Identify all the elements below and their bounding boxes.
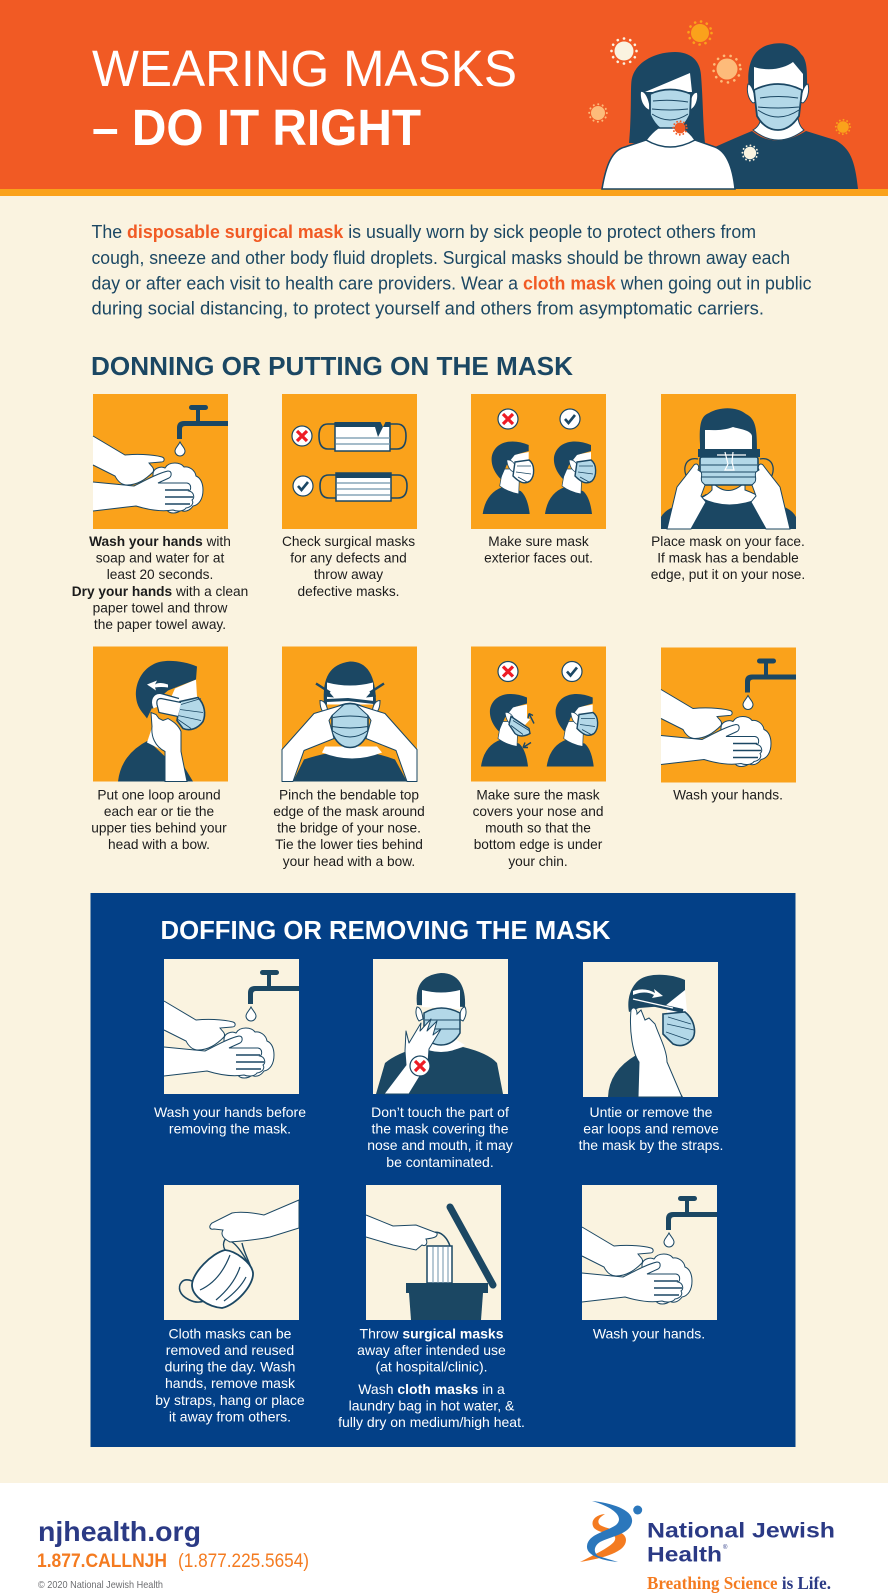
doffing step 5: bin: Throw surgical masks bbox=[360, 1325, 504, 1341]
step 1: wash hands: soap and water for at bbox=[96, 551, 224, 566]
step 7: cover nose and mouth: mouth so that the bbox=[485, 821, 591, 836]
step 2: check masks: throw away bbox=[314, 567, 383, 582]
header banner bbox=[0, 0, 888, 196]
virus particles bbox=[589, 22, 850, 161]
step 4: place mask on face: edge, put it on your nose. bbox=[651, 567, 805, 582]
step 6: pinch the bendable edge: Pinch the bendable top bbox=[279, 787, 419, 802]
step 2: check masks bbox=[282, 394, 417, 599]
doffing step 4: cloth mask: it away from others. bbox=[169, 1408, 291, 1424]
doffing step 3: remove ear loops bbox=[579, 962, 723, 1153]
intro paragraph bbox=[92, 222, 812, 318]
title: WEARING MASKS bbox=[92, 40, 517, 97]
logo: National Jewish Health: National Jewish bbox=[647, 1520, 835, 1542]
step 1: wash hands: least 20 seconds. bbox=[107, 567, 213, 582]
step 5: put loop around ear: head with a bow. bbox=[108, 837, 210, 852]
step 6: pinch the bendable edge: the bridge of your nose. bbox=[277, 821, 421, 836]
step 2: check masks: defective masks. bbox=[298, 584, 399, 599]
step 5: put loop around ear: each ear or tie the bbox=[104, 804, 214, 819]
logo: National Jewish Health: Breathing Science is Life. bbox=[647, 1573, 831, 1593]
doffing step 5: bin: fully dry on medium/high heat. bbox=[338, 1414, 525, 1430]
website and phone: njhealth.org bbox=[38, 1516, 201, 1547]
heading: doffing: DOFFING OR REMOVING THE MASK bbox=[160, 917, 611, 945]
doffing step 2: don't touch the mask: nose and mouth, it may bbox=[367, 1137, 513, 1153]
step 6: pinch the bendable edge: edge of the mask around bbox=[273, 804, 425, 819]
doffing step 1: wash hands: removing the mask. bbox=[169, 1121, 291, 1137]
step 7: cover nose and mouth: bottom edge is under bbox=[474, 837, 603, 852]
title bbox=[92, 40, 517, 156]
doffing step 5: bin: laundry bag in hot water, & bbox=[349, 1398, 515, 1414]
doffing step 3: remove ear loops: Untie or remove the bbox=[590, 1104, 713, 1120]
doffing step 1: wash hands bbox=[154, 959, 306, 1137]
doffing step 2: don't touch the mask: be contaminated. bbox=[386, 1154, 494, 1170]
step 7: cover nose and mouth: Make sure the mask bbox=[476, 787, 600, 802]
step 8: wash hands bbox=[661, 648, 796, 802]
doffing step 5: bin: away after intended use bbox=[357, 1342, 506, 1358]
intro paragraph: The disposable surgical mask is usually worn by sick people to protect others from bbox=[92, 222, 756, 242]
intro paragraph: day or after each visit to health care providers. Wear a cloth mask when going out in public bbox=[92, 274, 812, 294]
step 6: pinch the bendable edge: Tie the lower ties behind bbox=[275, 837, 423, 852]
step 6: pinch the bendable edge: your head with a bow. bbox=[283, 854, 415, 869]
doffing step 4: cloth mask: during the day. Wash bbox=[165, 1359, 295, 1375]
step 7: cover nose and mouth bbox=[471, 646, 606, 869]
doffing step 5: bin: Wash cloth masks in a bbox=[358, 1381, 505, 1397]
doffing step 2: don't touch the mask: the mask covering the bbox=[372, 1121, 509, 1137]
step 7: cover nose and mouth: your chin. bbox=[508, 854, 568, 869]
step 1: wash hands: Dry your hands with a clean bbox=[72, 584, 248, 599]
website and phone: (1.877.225.5654) bbox=[178, 1551, 309, 1572]
panel: doffing bbox=[90, 893, 796, 1447]
logo: National Jewish Health bbox=[580, 1501, 835, 1593]
step 6: pinch the bendable edge bbox=[273, 646, 425, 869]
intro paragraph: during social distancing, to protect yourself and others from asymptomatic carriers. bbox=[92, 298, 764, 318]
website and phone: © 2020 National Jewish Health bbox=[38, 1579, 163, 1591]
doffing step 4: cloth mask: hands, remove mask bbox=[165, 1375, 296, 1391]
step 3: mask exterior faces out bbox=[471, 394, 606, 566]
step 2: check masks: Check surgical masks bbox=[282, 534, 415, 549]
doffing step 6: wash hands: Wash your hands. bbox=[593, 1325, 705, 1341]
step 2: check masks: for any defects and bbox=[290, 551, 407, 566]
heading: donning: DONNING OR PUTTING ON THE MASK bbox=[91, 353, 574, 381]
step 4: place mask on face: If mask has a bendable bbox=[657, 551, 799, 566]
doffing step 4: cloth mask: Cloth masks can be bbox=[169, 1325, 292, 1341]
step 3: mask exterior faces out: Make sure mask bbox=[488, 534, 589, 549]
step 3: mask exterior faces out: exterior faces out. bbox=[484, 551, 593, 566]
doffing step 5: bin bbox=[338, 1185, 525, 1430]
intro paragraph: cough, sneeze and other body fluid droplets. Surgical masks should be thrown away each bbox=[92, 248, 790, 268]
logo: National Jewish Health: ® bbox=[723, 1544, 728, 1551]
doffing step 3: remove ear loops: ear loops and remove bbox=[583, 1121, 719, 1137]
illustration: masked man and woman with virus particles bbox=[589, 22, 858, 189]
doffing step 5: bin: (at hospital/clinic). bbox=[375, 1359, 488, 1375]
logo: National Jewish Health: Health bbox=[647, 1544, 722, 1566]
footer bbox=[0, 1483, 888, 1593]
doffing step 4: cloth mask: by straps, hang or place bbox=[155, 1392, 305, 1408]
doffing step 4: cloth mask: removed and reused bbox=[166, 1342, 294, 1358]
doffing step 3: remove ear loops: the mask by the straps. bbox=[579, 1137, 723, 1153]
step 1: wash hands: Wash your hands with bbox=[89, 534, 231, 549]
doffing step 2: don't touch the mask: Don’t touch the part of bbox=[371, 1104, 509, 1120]
doffing step 2: don't touch the mask bbox=[367, 959, 513, 1170]
step 5: put loop around ear: upper ties behind your bbox=[91, 821, 227, 836]
website and phone: 1.877.CALLNJH bbox=[37, 1551, 167, 1572]
doffing step 6: wash hands bbox=[582, 1185, 717, 1341]
doffing step 1: wash hands: Wash your hands before bbox=[154, 1104, 306, 1120]
step 8: wash hands: Wash your hands. bbox=[673, 787, 783, 802]
step 1: wash hands bbox=[72, 394, 248, 632]
doffing step 4: cloth mask bbox=[155, 1185, 305, 1424]
title: – DO IT RIGHT bbox=[92, 99, 421, 156]
step 4: place mask on face bbox=[651, 394, 805, 582]
step 4: place mask on face: Place mask on your face. bbox=[651, 534, 805, 549]
step 7: cover nose and mouth: covers your nose and bbox=[473, 804, 603, 819]
step 5: put loop around ear bbox=[91, 646, 228, 852]
step 1: wash hands: the paper towel away. bbox=[94, 617, 226, 632]
step 1: wash hands: paper towel and throw bbox=[93, 600, 227, 615]
website and phone bbox=[37, 1516, 309, 1591]
step 5: put loop around ear: Put one loop around bbox=[97, 787, 221, 802]
